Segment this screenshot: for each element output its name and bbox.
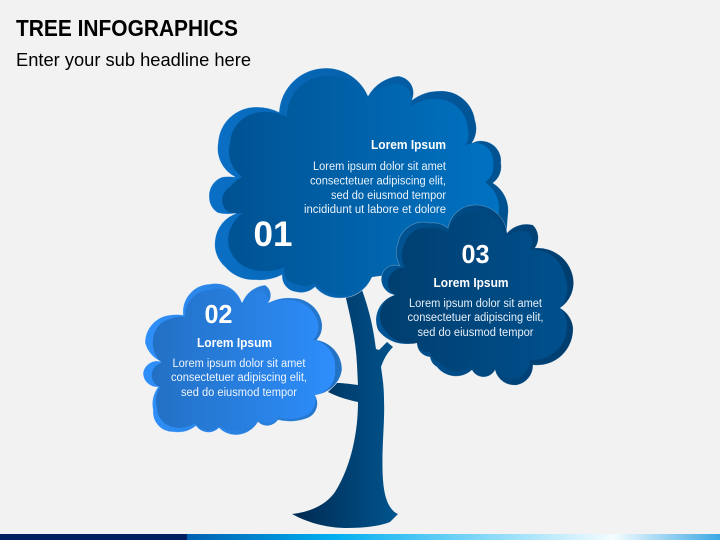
cloud 01 body text: sed do eiusmod tempor bbox=[331, 190, 446, 202]
cloud 01 body text: incididunt ut labore et dolore bbox=[304, 204, 446, 216]
cloud 02 body text: consectetuer adipiscing elit, bbox=[171, 372, 307, 384]
bottom bar bbox=[0, 534, 720, 540]
cloud 01 body text: consectetuer adipiscing elit, bbox=[310, 176, 446, 188]
cloud 01 body text bbox=[304, 161, 447, 216]
title: TREE INFOGRAPHICS bbox=[16, 15, 238, 41]
cloud 03 heading: Lorem Ipsum bbox=[434, 276, 508, 290]
cloud 03 bbox=[376, 205, 574, 385]
cloud 03 body text: consectetuer adipiscing elit, bbox=[408, 312, 544, 324]
cloud 01 bbox=[209, 68, 508, 298]
cloud 03 body text: sed do eiusmod tempor bbox=[418, 327, 534, 339]
cloud 02 heading: Lorem Ipsum bbox=[197, 336, 272, 350]
cloud 02 inner layer bbox=[152, 289, 335, 431]
cloud 01 body text: Lorem ipsum dolor sit amet bbox=[313, 161, 447, 173]
cloud 03 body text: Lorem ipsum dolor sit amet bbox=[409, 298, 543, 310]
cloud 03 body text bbox=[408, 298, 544, 339]
cloud 01 heading: Lorem Ipsum bbox=[371, 138, 446, 152]
cloud 03 inner layer bbox=[380, 211, 567, 379]
subtitle: Enter your sub headline here bbox=[16, 49, 251, 70]
cloud 02 number: 02 bbox=[204, 299, 232, 329]
tree trunk bbox=[292, 290, 398, 528]
cloud 03 number: 03 bbox=[462, 239, 490, 269]
cloud 01 inner layer bbox=[222, 76, 499, 295]
cloud 02 body text: Lorem ipsum dolor sit amet bbox=[172, 358, 306, 370]
cloud 01 number: 01 bbox=[254, 215, 292, 254]
cloud 02 body text: sed do eiusmod tempor bbox=[181, 387, 297, 399]
cloud 02 body text bbox=[171, 358, 307, 399]
cloud 01 outer layer bbox=[209, 68, 508, 298]
cloud 03 outer layer bbox=[376, 205, 574, 385]
cloud 02 outer layer bbox=[143, 283, 342, 435]
cloud 02 bbox=[143, 283, 342, 435]
